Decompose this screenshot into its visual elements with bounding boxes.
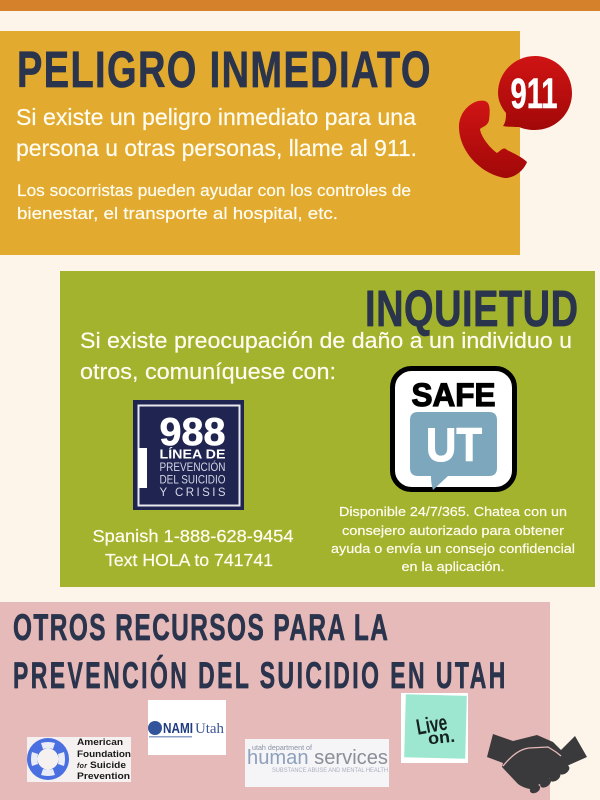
- logo: american foundation for suicide prevention: Prevention: [77, 771, 130, 782]
- text: safe ut description: Disponible 24/7/365. Chatea con un: [339, 504, 567, 519]
- icon: handshake: [487, 734, 587, 795]
- logo: nami utah: Utah: [195, 721, 224, 737]
- logo: live on: [401, 693, 468, 763]
- text: peligro main: persona u otras personas, llame al 911.: [16, 135, 417, 161]
- text: safe ut description: ayuda o envía un consejo confidencial: [331, 541, 575, 556]
- logo: american foundation for suicide prevention: [27, 737, 131, 782]
- logo: human services: SUBSTANCE ABUSE AND MENTAL HEALTH: [272, 768, 388, 774]
- text: peligro main: Si existe un peligro inmediato para una: [16, 104, 416, 130]
- logo: nami utah: NAMI: [163, 720, 193, 737]
- text: phone numbers: Text HOLA to 741741: [105, 550, 273, 570]
- logo: 988: PREVENCIÓN: [160, 461, 226, 474]
- panel: inquietud: [60, 271, 595, 587]
- logo: human services: [245, 739, 389, 787]
- heading: otros recursos: PREVENCIÓN DEL SUICIDIO EN UTAH: [13, 653, 505, 696]
- logo: human services: utah department of: [252, 745, 312, 752]
- text: peligro detail: Los socorristas pueden ayudar con los controles de: [17, 181, 411, 200]
- logo: human services: human services: [247, 747, 388, 769]
- logo: 988: DEL SUICIDIO: [160, 474, 226, 486]
- logo: nami utah: [148, 700, 226, 755]
- panel: otros recursos: [0, 602, 550, 800]
- heading: peligro inmediato: PELIGRO INMEDIATO: [17, 41, 430, 98]
- logo: american foundation for suicide prevention: American: [77, 737, 123, 748]
- text: inquietud intro: Si existe preocupación de daño a un individuo u: [80, 328, 572, 353]
- heading: otros recursos: OTROS RECURSOS PARA LA: [13, 607, 388, 648]
- logo: safe ut: SAFE: [412, 377, 496, 413]
- icon: 911 phone: [459, 56, 572, 178]
- text: phone numbers: Spanish 1-888-628-9454: [92, 526, 294, 546]
- logo: safe ut: [392, 368, 514, 490]
- logo: safe ut: UT: [426, 418, 482, 471]
- logo: american foundation for suicide prevention: Foundation: [77, 749, 131, 760]
- heading: inquietud: INQUIETUD: [365, 280, 578, 337]
- icon: 911 phone: 911: [510, 70, 558, 118]
- logo: 988: 988: [160, 411, 226, 454]
- logo: 988: Y CRISIS: [160, 487, 226, 499]
- logo: 988: LÍNEA DE: [160, 446, 226, 462]
- logo: live on: on.: [427, 727, 456, 748]
- logo: 988: [133, 400, 244, 510]
- panel: peligro inmediato: [0, 31, 520, 255]
- text: safe ut description: en la aplicación.: [402, 559, 504, 574]
- text: inquietud intro: otros, comuníquese con:: [80, 359, 336, 384]
- text: safe ut description: consejero autorizado para obtener: [342, 523, 565, 538]
- top bar: [0, 0, 600, 11]
- logo: live on: Live: [414, 710, 449, 740]
- text: peligro detail: bienestar, el transporte al hospital, etc.: [17, 204, 338, 223]
- logo: american foundation for suicide prevention: for: [77, 763, 88, 770]
- heading: otros recursos: [13, 607, 505, 696]
- logo: american foundation for suicide prevention: Suicide: [90, 760, 126, 771]
